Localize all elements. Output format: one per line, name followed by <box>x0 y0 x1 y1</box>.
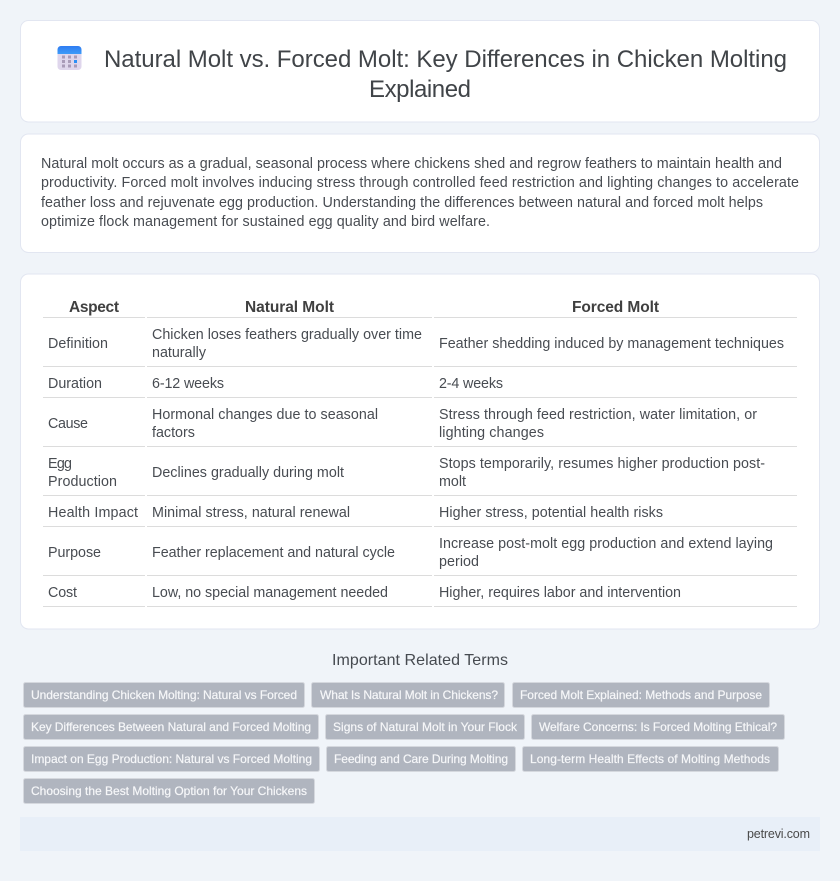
text block: introduction paragraph <box>41 156 799 230</box>
tag <box>512 682 770 708</box>
table row: purpose: period <box>439 554 479 570</box>
table row: health impact <box>48 505 663 521</box>
tag <box>24 682 304 708</box>
panel: introduction <box>20 134 820 252</box>
text block: introduction paragraph: feather loss and rejuvenate egg production. Understanding the differences between natural and forced molt helps <box>41 195 763 211</box>
table row: health impact: Minimal stress, natural renewal <box>152 505 350 521</box>
table row: duration: 6-12 weeks <box>152 376 224 392</box>
tag <box>312 682 504 708</box>
table row: egg production: Declines gradually during molt <box>152 465 344 481</box>
icon: calendar <box>58 46 82 70</box>
table row: cause: Stress through feed restriction, water limitation, or <box>439 407 757 423</box>
table row: cause <box>48 407 757 441</box>
tag: Signs of Natural Molt in Your Flock <box>333 720 518 734</box>
text block: introduction paragraph: productivity. Forced molt involves inducing stress through controlled feed restriction and lighting changes to accelerate <box>41 175 799 191</box>
table row: definition: naturally <box>152 345 207 361</box>
tag <box>326 714 524 740</box>
table row: cost: Higher, requires labor and intervention <box>439 585 681 601</box>
tag: Forced Molt Explained: Methods and Purpose <box>520 688 762 702</box>
tag <box>522 746 778 772</box>
title: Explained <box>369 76 471 103</box>
table row: duration: 2-4 weeks <box>439 376 503 392</box>
table row: egg production: Production <box>48 474 117 490</box>
table row: definition: Definition <box>48 336 108 352</box>
table row: health impact: Health Impact <box>48 505 138 521</box>
table row: cost <box>48 585 681 601</box>
text block: introduction paragraph: Natural molt occurs as a gradual, seasonal process where chickens shed and regrow feathers to maintain health and <box>41 156 782 172</box>
panel: comparison table <box>20 274 820 629</box>
heading: important related terms: Important Related Terms <box>332 652 508 669</box>
tag <box>532 714 784 740</box>
tag: Key Differences Between Natural and Forced Molting <box>31 720 311 734</box>
table row: cause: Cause <box>48 416 88 432</box>
tag <box>24 714 318 740</box>
tag: Feeding and Care During Molting <box>334 752 508 766</box>
tag: Long-term Health Effects of Molting Methods <box>530 752 770 766</box>
table row: cause: Hormonal changes due to seasonal <box>152 407 378 423</box>
table row: duration <box>48 376 503 392</box>
table row: egg production <box>48 456 765 490</box>
tag: Impact on Egg Production: Natural vs Forced Molting <box>31 752 312 766</box>
tag: Welfare Concerns: Is Forced Molting Ethical? <box>539 720 777 734</box>
title <box>104 46 787 103</box>
tag <box>24 746 320 772</box>
table row: health impact: Higher stress, potential health risks <box>439 505 663 521</box>
table header row: Natural Molt <box>245 299 334 316</box>
table row: cost: Cost <box>48 585 77 601</box>
tag: Choosing the Best Molting Option for Your Chickens <box>31 784 307 798</box>
text block: introduction paragraph: optimize flock management for sustained egg quality and bird welfare. <box>41 214 490 230</box>
table header row: Aspect <box>69 299 119 316</box>
tag <box>24 778 314 804</box>
footer band <box>20 817 820 851</box>
tag: Understanding Chicken Molting: Natural vs Forced <box>31 688 297 702</box>
table row: definition: Feather shedding induced by management techniques <box>439 336 784 352</box>
table header row: Forced Molt <box>572 299 659 316</box>
table row: egg production: Egg <box>48 456 72 472</box>
table row: duration: Duration <box>48 376 102 392</box>
table row: definition: Chicken loses feathers gradually over time <box>152 327 422 343</box>
table row: purpose: Increase post-molt egg production and extend laying <box>439 536 773 552</box>
table row: egg production: molt <box>439 474 466 490</box>
table header row <box>69 299 659 316</box>
table row: egg production: Stops temporarily, resumes higher production post- <box>439 456 765 472</box>
table row: purpose <box>48 536 773 570</box>
tag: What Is Natural Molt in Chickens? <box>320 688 498 702</box>
footer site name: petrevi.com <box>747 827 810 841</box>
table row: purpose: Feather replacement and natural cycle <box>152 545 395 561</box>
panel: title header <box>20 20 820 122</box>
title: Natural Molt vs. Forced Molt: Key Differences in Chicken Molting <box>104 46 787 73</box>
table row: definition <box>48 327 784 361</box>
related terms tag list <box>24 682 784 804</box>
table row: cause: factors <box>152 425 195 441</box>
table row: purpose: Purpose <box>48 545 101 561</box>
table row: cause: lighting changes <box>439 425 544 441</box>
tag <box>326 746 516 772</box>
table row: cost: Low, no special management needed <box>152 585 388 601</box>
